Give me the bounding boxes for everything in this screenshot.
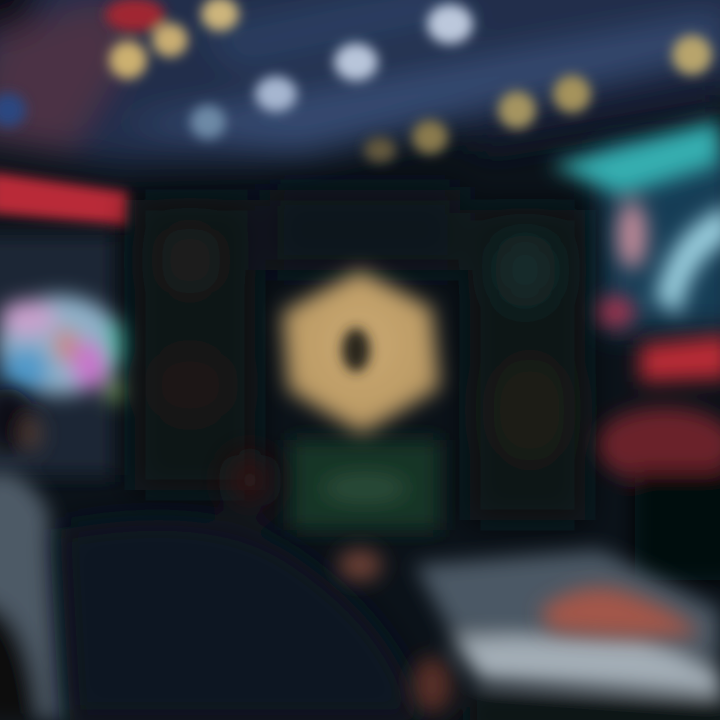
- icon: gold hexagon badge: [282, 270, 440, 434]
- foreground central figure: [60, 454, 420, 720]
- left screen: [0, 235, 126, 475]
- right screen: [550, 120, 720, 330]
- ceiling lights: [0, 0, 712, 163]
- foreground left person: [0, 388, 65, 720]
- central dark panels: [135, 190, 585, 520]
- ceiling: [0, 0, 720, 165]
- hands on desk: [540, 588, 700, 637]
- right red sign and figure: [595, 335, 720, 580]
- central green panel: [290, 440, 440, 530]
- icon: keyhole centre: [342, 328, 370, 372]
- desk: [338, 549, 720, 720]
- left red sign: [0, 172, 128, 226]
